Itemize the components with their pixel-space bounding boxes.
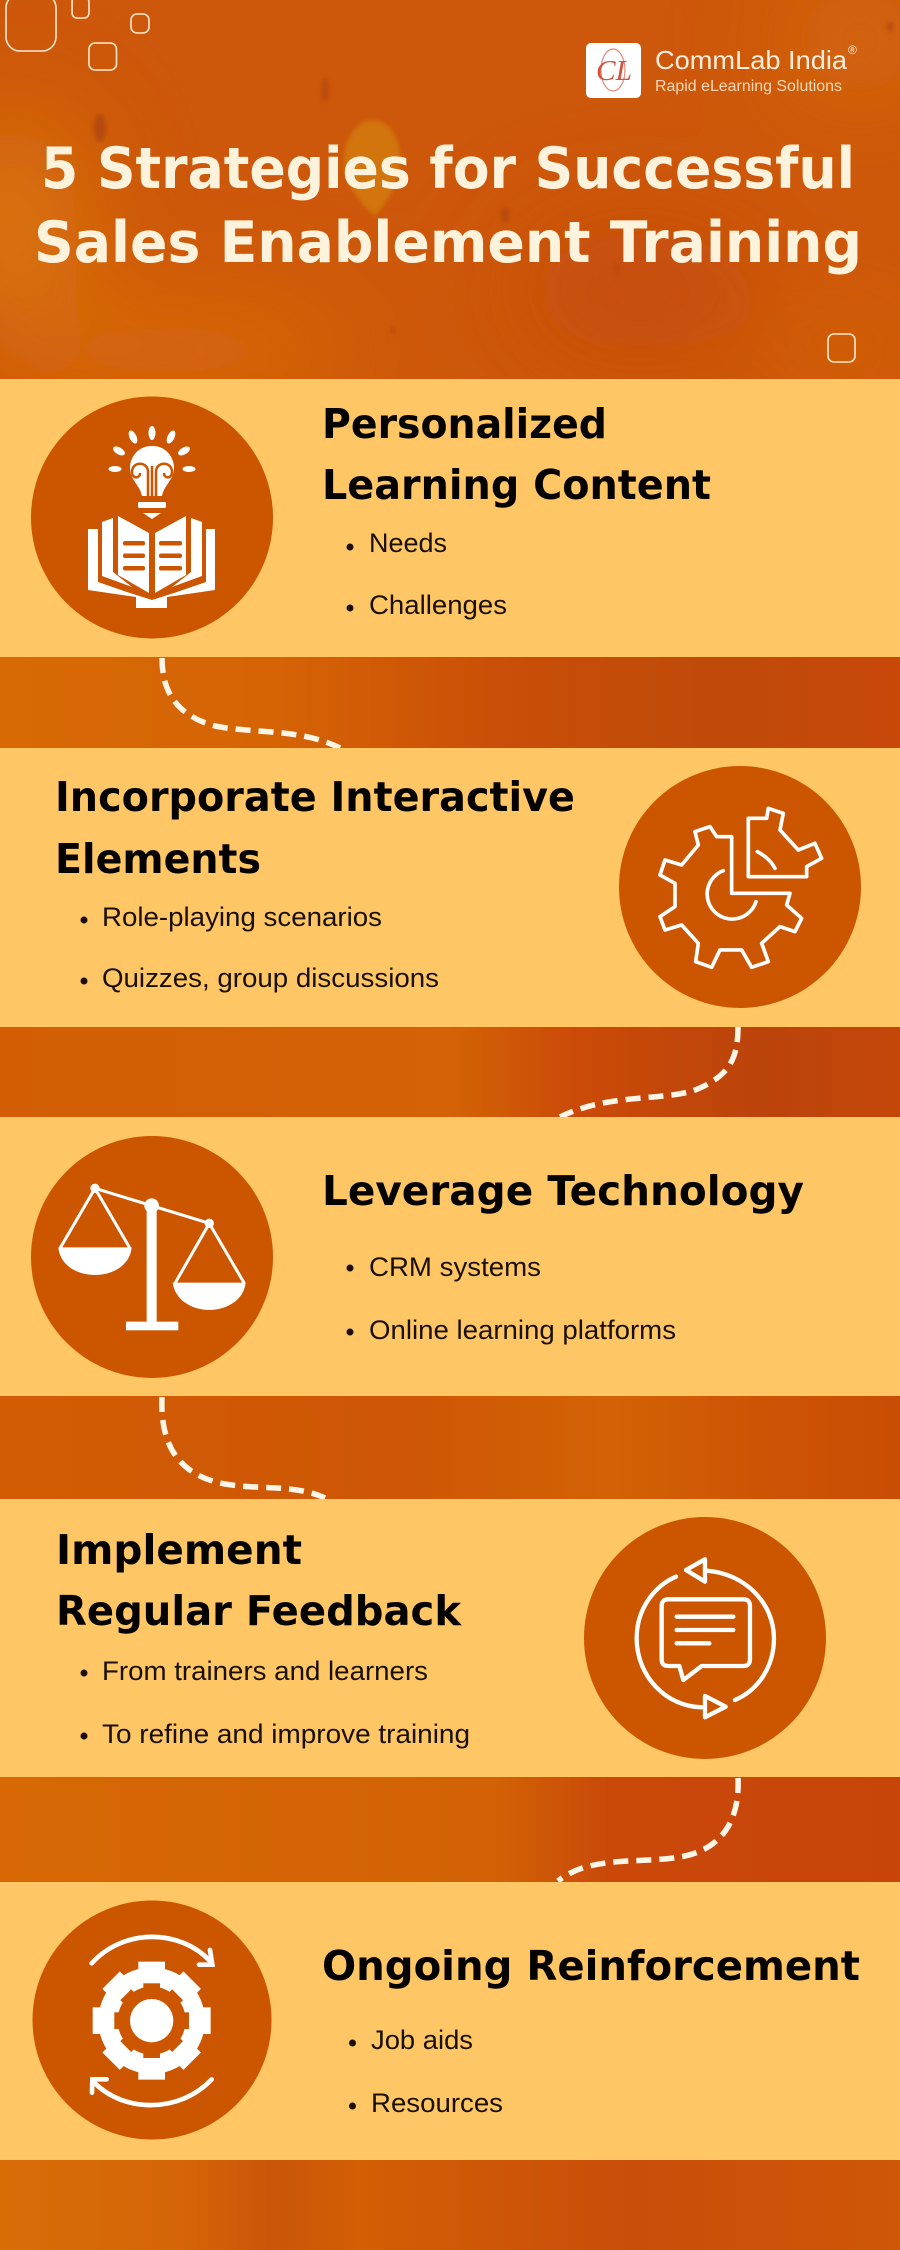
bullet list: Job aids <box>371 2025 473 2055</box>
bullet list <box>349 2025 503 2118</box>
bullet list <box>346 528 507 620</box>
heading <box>322 400 711 509</box>
panel: leverage technology <box>0 1117 900 1396</box>
bullet list <box>80 1656 470 1749</box>
bullet list: Role-playing scenarios <box>102 902 382 932</box>
bullet list: CRM systems <box>369 1252 541 1282</box>
logo: CommLab India <box>586 43 857 98</box>
arrow: dashed connector 3 <box>162 1397 325 1498</box>
bullet list: Resources <box>371 2088 503 2118</box>
logo: CommLab India: ® <box>848 43 857 57</box>
arrow: dashed connector 2 <box>560 1027 738 1117</box>
heading: Implement <box>56 1526 302 1574</box>
bullet list: To refine and improve training <box>102 1719 470 1749</box>
title: 5 Strategies for Successful <box>41 136 855 202</box>
bullet list <box>346 1252 676 1345</box>
panel: personalized learning content <box>0 379 900 657</box>
bullet list <box>80 902 439 993</box>
heading: Personalized <box>322 400 607 448</box>
bullet list: Online learning platforms <box>369 1315 676 1345</box>
title <box>34 136 862 276</box>
logo: CommLab India: CommLab India <box>655 45 848 75</box>
logo: CommLab India: CL <box>596 55 632 87</box>
heading: Incorporate Interactive <box>55 773 575 821</box>
bullet list: Challenges <box>369 590 507 620</box>
panel: ongoing reinforcement <box>0 1882 900 2160</box>
heading: Ongoing Reinforcement <box>322 1942 860 1990</box>
arrow: dashed connector 4 <box>558 1778 738 1881</box>
logo: CommLab India: Rapid eLearning Solutions <box>655 78 842 95</box>
heading <box>56 1526 463 1635</box>
icon: balance scales <box>31 1136 273 1378</box>
icon: gear with slice <box>619 766 861 1008</box>
heading <box>55 773 575 883</box>
icon: feedback chat loop <box>584 1517 826 1759</box>
panel: incorporate interactive elements <box>0 748 900 1027</box>
bullet list: Needs <box>369 528 447 558</box>
decorative rounded squares <box>6 0 855 362</box>
bullet list: Quizzes, group discussions <box>102 963 439 993</box>
icon: lightbulb over open book <box>31 396 273 638</box>
heading: Regular Feedback <box>56 1587 463 1635</box>
heading: Elements <box>55 835 261 883</box>
title: Sales Enablement Training <box>34 210 862 276</box>
bullet list: From trainers and learners <box>102 1656 428 1686</box>
arrow: dashed connector 1 <box>162 658 340 748</box>
heading: Learning Content <box>322 461 711 509</box>
icon: gear with cycle arrows <box>32 1900 272 2140</box>
heading: Leverage Technology <box>322 1167 804 1215</box>
panel: implement regular feedback <box>0 1499 900 1777</box>
